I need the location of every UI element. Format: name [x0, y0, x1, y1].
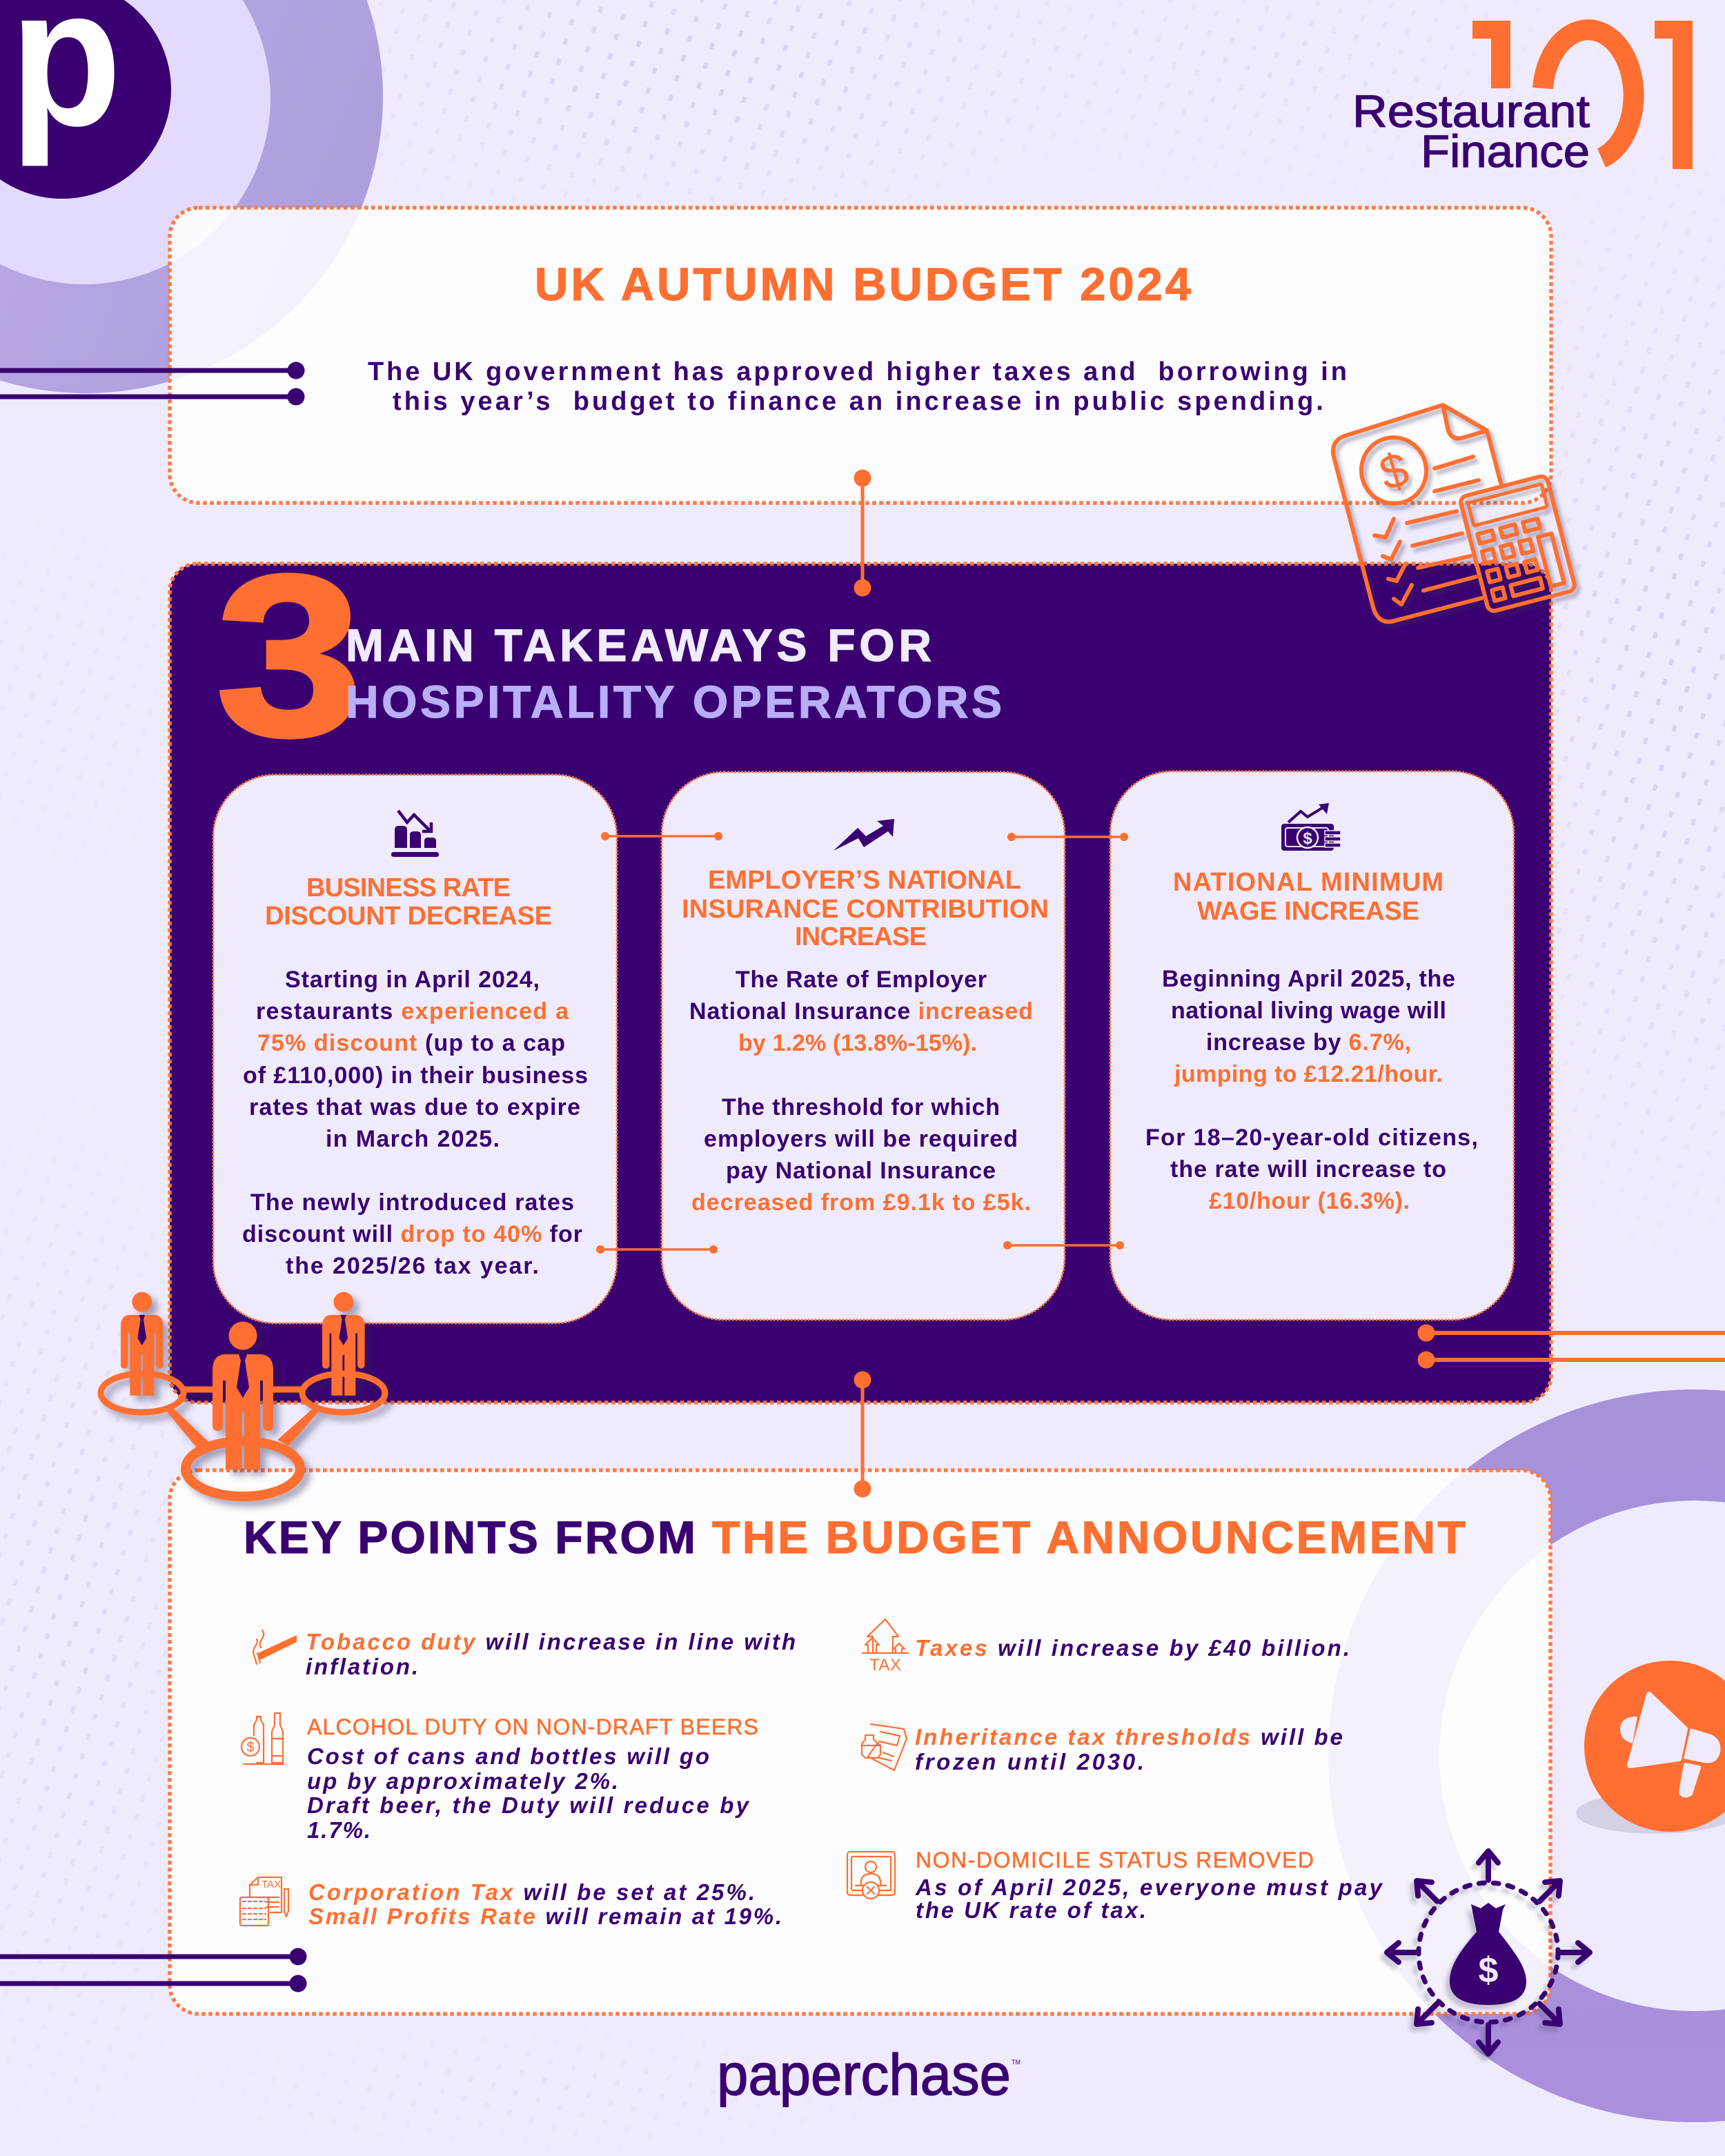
item: non-domicile status	[847, 1848, 1383, 1923]
card body text: the rate will increase to	[1170, 1156, 1446, 1183]
card heading: BUSINESS RATE	[306, 873, 511, 902]
heading: main takeaways for hospitality operators	[346, 620, 1002, 727]
item: tobacco duty: inflation.	[306, 1654, 418, 1679]
item: taxes	[862, 1619, 1350, 1674]
icon: tax document and calculator	[240, 1877, 288, 1926]
card body text: Beginning April 2025, the	[1162, 966, 1455, 992]
heading: main takeaways for hospitality operators: HOSPITALITY OPERATORS	[346, 676, 1002, 727]
item: tobacco duty: Tobacco duty will increase in line with	[306, 1629, 796, 1654]
item: non-domicile status: NON-DOMICILE STATUS REMOVED	[916, 1848, 1314, 1872]
panel: main takeaways	[170, 528, 1551, 1403]
title: UK Autumn Budget 2024: UK AUTUMN BUDGET 2024	[535, 259, 1191, 310]
logo: Restaurant Finance 101: Restaurant	[1352, 86, 1590, 137]
card body text: Starting in April 2024,	[285, 967, 540, 993]
heading: key points: THE BUDGET ANNOUNCEMENT	[712, 1512, 1466, 1563]
card body text: The Rate of Employer	[736, 967, 987, 993]
card body text: The threshold for which	[722, 1094, 1000, 1120]
icon: three connected business people	[101, 1292, 385, 1496]
card body text: increase by 6.7%,	[1206, 1029, 1411, 1056]
icon: money bag with arrows: $	[1479, 1950, 1499, 1990]
card body text: by 1.2% (13.8%-15%).	[738, 1030, 977, 1056]
panel: UK Autumn Budget intro	[170, 208, 1551, 503]
card body text	[1145, 966, 1478, 1214]
right person	[322, 1292, 365, 1396]
centre person	[213, 1322, 273, 1470]
item: tobacco duty	[253, 1629, 796, 1679]
connector lines: bottom left purple	[0, 1948, 306, 1992]
connector lines: top left purple	[0, 362, 305, 406]
icon: megaphone in orange circle	[1576, 1661, 1725, 1834]
icon: tax document and calculator: TAX	[262, 1879, 281, 1890]
item: corporation tax: Corporation Tax will be set at 25%.	[308, 1879, 755, 1905]
item: alcohol duty	[241, 1713, 758, 1843]
item: corporation tax: Small Profits Rate will remain at 19%.	[308, 1903, 782, 1929]
icon: falling bar chart	[391, 811, 439, 857]
item: alcohol duty: Cost of cans and bottles will go	[307, 1743, 709, 1769]
icon: bottles and coin	[241, 1713, 284, 1764]
icon: rising arrow	[834, 819, 894, 851]
card: business rate discount	[213, 775, 617, 1323]
item: non-domicile status: As of April 2025, everyone must pay	[915, 1875, 1383, 1900]
card body text: pay National Insurance	[726, 1158, 996, 1184]
item: inheritance tax	[862, 1724, 1343, 1774]
item: taxes: Taxes will increase by £40 billion.	[915, 1635, 1350, 1661]
card body text	[689, 967, 1033, 1216]
item: non-domicile status: the UK rate of tax.	[916, 1897, 1146, 1923]
item: alcohol duty: Draft beer, the Duty will reduce by	[307, 1792, 750, 1818]
card heading	[265, 873, 552, 931]
heading: main takeaways for hospitality operators: MAIN TAKEAWAYS FOR	[346, 620, 931, 671]
card heading: NATIONAL MINIMUM	[1173, 868, 1443, 897]
item: alcohol duty: up by approximately 2%.	[307, 1768, 618, 1794]
card body text: jumping to £12.21/hour.	[1174, 1061, 1443, 1087]
icon: invoice document and calculator	[1333, 405, 1576, 622]
connector: intro to takeaways	[854, 469, 871, 596]
icon: invoice document and calculator: $	[1374, 442, 1414, 501]
icon: cigarette	[253, 1630, 297, 1664]
icon: money bag with arrows	[1387, 1851, 1590, 2054]
icon: tax arrows	[862, 1619, 908, 1674]
connector lines: right orange	[1417, 1325, 1725, 1369]
card body text: decreased from £9.1k to £5k.	[691, 1189, 1031, 1216]
icon: tax arrows: TAX	[869, 1656, 901, 1674]
heading: key points: KEY POINTS FROM	[244, 1512, 696, 1563]
card body text: The newly introduced rates	[250, 1189, 574, 1216]
card: employer's national insurance	[662, 772, 1065, 1320]
card heading: EMPLOYER’S NATIONAL	[708, 866, 1021, 895]
item: alcohol duty: ALCOHOL DUTY ON NON-DRAFT BEERS	[307, 1714, 758, 1739]
icon: banknote with rising arrow: $	[1303, 829, 1312, 848]
icon: person with cross	[847, 1852, 895, 1899]
intro paragraph: this year’s budget to finance an increase in public spending.	[393, 387, 1323, 416]
logo: Restaurant Finance 101: Finance	[1421, 126, 1590, 177]
icon: inheritance documents	[862, 1724, 907, 1770]
intro paragraph: The UK government has approved higher taxes and borrowing in	[368, 357, 1347, 386]
item: inheritance tax: Inheritance tax thresholds will be	[915, 1724, 1343, 1750]
item: alcohol duty: 1.7%.	[307, 1817, 371, 1843]
icon: banknote with rising arrow	[1281, 803, 1341, 851]
decorative ring: bottom right	[1328, 1389, 1725, 2122]
card body text: £10/hour (16.3%).	[1209, 1188, 1410, 1214]
logo: paperchase p badge	[0, 0, 171, 199]
card body text: For 18–20-year-old citizens,	[1145, 1125, 1478, 1151]
card heading: WAGE INCREASE	[1197, 897, 1419, 926]
left person	[121, 1292, 164, 1396]
card body text: rates that was due to expire	[249, 1094, 580, 1120]
card body text: employers will be required	[704, 1126, 1018, 1152]
logo: Restaurant Finance 101	[1352, 21, 1693, 177]
card heading	[1173, 868, 1443, 926]
connector: takeaways to key points	[854, 1372, 871, 1497]
card: national minimum wage	[1110, 771, 1514, 1320]
decorative circles: top left	[0, 0, 383, 393]
item: inheritance tax: frozen until 2030.	[915, 1749, 1144, 1774]
card body text: 75% discount (up to a cap	[257, 1030, 565, 1056]
logo: paperchase wordmark: paperchase	[717, 2042, 1011, 2107]
card heading: DISCOUNT DECREASE	[265, 902, 552, 931]
intro paragraph	[368, 357, 1347, 416]
card body text: the 2025/26 tax year.	[286, 1253, 539, 1279]
card body text: discount will drop to 40% for	[242, 1221, 582, 1247]
card body text: national living wage will	[1171, 998, 1446, 1024]
card body text: in March 2025.	[326, 1126, 500, 1152]
item: corporation tax	[240, 1877, 782, 1929]
icon: bottles and coin: $	[246, 1740, 255, 1755]
card heading: INSURANCE CONTRIBUTION	[682, 895, 1049, 924]
panel: key points from the budget announcement	[170, 1470, 1550, 2014]
card body text: restaurants experienced a	[256, 998, 569, 1025]
card heading: INCREASE	[795, 922, 927, 951]
network links and rings	[101, 1374, 385, 1496]
calculator	[1459, 475, 1576, 613]
card heading	[682, 866, 1049, 951]
card body text: National Insurance increased	[689, 998, 1033, 1025]
card body text: of £110,000) in their business	[243, 1062, 588, 1089]
card body text	[242, 967, 588, 1279]
logo: paperchase wordmark: TM	[1012, 2059, 1021, 2066]
big number 3: 3	[216, 528, 362, 784]
connector lines between cards	[596, 832, 1128, 1254]
heading: key points	[244, 1512, 1466, 1563]
